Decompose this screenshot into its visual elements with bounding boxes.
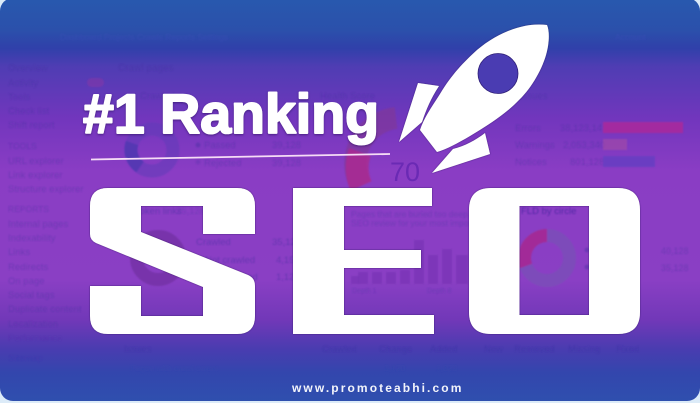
top bar faint menu: Account: [615, 32, 646, 42]
bottom table row: Pages with crawl errors: [130, 363, 218, 373]
rocket body: [420, 24, 549, 152]
bottom table row: 1,028: [436, 363, 458, 373]
activity badge: [87, 78, 104, 87]
website url: www.promoteabhi.com: [291, 381, 463, 395]
sidebar navigation text: Shift report: [8, 120, 55, 131]
bar chart description: Depth 8: [427, 288, 452, 295]
traffic legend: Crawled: [140, 91, 175, 102]
sidebar navigation text: On page: [8, 276, 44, 287]
sidebar navigation text: Redirects: [8, 262, 48, 273]
bottom table row: [130, 363, 458, 373]
letter O: [469, 188, 640, 334]
dashboard heading: Crawl pages: [118, 63, 174, 74]
crawl depth bar chart: [351, 240, 468, 284]
sidebar navigation text: Activity: [8, 78, 38, 89]
traffic legend: Rejected: [204, 158, 242, 169]
traffic legend: [140, 91, 375, 169]
sidebar navigation text: Performance: [8, 333, 62, 344]
issues table: Errors: [515, 123, 541, 134]
letter S: [90, 188, 255, 334]
links section text: Blocked: [224, 272, 258, 283]
sidebar navigation text: [8, 63, 84, 364]
circle section title: FLD by circle: [521, 206, 576, 217]
SEO letters: [90, 188, 640, 334]
bar chart description: [351, 209, 517, 295]
bottom table header: Crawled: [322, 344, 357, 355]
links section text: 4,157: [276, 255, 300, 266]
top bar faint menu: Dashboard Projects Crawls Reports Settings: [60, 32, 228, 42]
right donut legend: 40,128: [661, 246, 689, 256]
issues table: Warnings: [515, 140, 555, 151]
rocket left fin: [399, 83, 439, 142]
sidebar navigation text: URL explorer: [8, 156, 64, 167]
sidebar navigation text: Indexability: [8, 233, 56, 244]
right donut chart: [524, 236, 570, 280]
headline: #1 Ranking: #1 Ranking: [83, 82, 379, 145]
gauge pink segment: [357, 152, 361, 186]
top bar faint menu: [60, 32, 646, 42]
issues bars: [603, 122, 683, 133]
links section text: Broken links: [130, 206, 182, 217]
sidebar navigation text: Duplicate content: [8, 304, 82, 315]
right donut legend: 35,128: [661, 263, 689, 273]
traffic legend: Passed: [204, 140, 236, 151]
sidebar navigation text: Links: [8, 247, 30, 258]
issues table: [515, 91, 608, 168]
bottom table row: 3,120: [384, 363, 406, 373]
sidebar navigation text: TOOLS: [8, 141, 37, 151]
issues table: 38,123,149: [560, 123, 608, 134]
links section text: Not crawled: [205, 255, 255, 266]
links section text: 1,128: [276, 272, 300, 283]
links section text: [130, 206, 301, 283]
issues table: 2,053,340: [563, 140, 605, 151]
letter E: [293, 188, 434, 334]
sidebar navigation text: Social tags: [8, 290, 55, 301]
bottom table header: [124, 344, 639, 355]
sidebar navigation text: REPORTS: [8, 204, 49, 214]
bar chart description: Depth 1: [352, 288, 377, 295]
rocket lower fin: [432, 133, 490, 173]
health score gauge: [355, 118, 396, 186]
top donut chart: [131, 129, 173, 171]
traffic legend: 39,128: [272, 140, 301, 151]
traffic legend: 39,128: [272, 158, 301, 169]
links section text: Crawled: [196, 237, 231, 248]
bottom table header: Change: [379, 344, 412, 355]
links section text: 25,128: [176, 206, 205, 217]
sidebar navigation text: Sitemap: [8, 353, 43, 364]
links donut behind the S: [136, 236, 180, 280]
sidebar navigation text: Internal pages: [8, 219, 68, 230]
issues table: Issues: [520, 91, 548, 102]
bottom table header: Removed: [514, 344, 555, 355]
bottom table header: Added: [430, 344, 457, 355]
right donut legend: [584, 246, 689, 273]
rocket window: [478, 54, 518, 94]
issues table: Notices: [515, 157, 547, 168]
sidebar navigation text: Tools: [8, 92, 30, 103]
sidebar navigation text: Structure explorer: [8, 184, 84, 195]
headline underline: [91, 154, 390, 160]
sidebar navigation text: Check list: [8, 106, 50, 117]
gauge value: 70: [390, 157, 420, 187]
sidebar navigation text: Link explorer: [8, 170, 62, 181]
bottom table header: New: [484, 344, 503, 355]
traffic legend: Health Score: [320, 91, 375, 102]
sidebar navigation text: Localization: [8, 319, 58, 330]
bar chart description: SEO review for your most important content: [351, 218, 517, 228]
sidebar navigation text: Overview: [8, 63, 48, 74]
issues table: 801,128: [570, 157, 604, 168]
rocket icon: [399, 24, 549, 173]
bar chart description: Pages that are buried too deep, or need a: [351, 209, 509, 219]
links section text: 35,128: [272, 237, 301, 248]
bottom table header: Missing: [568, 344, 600, 355]
bottom table header: Issues: [124, 344, 152, 355]
bottom table header: Fixed: [616, 344, 639, 355]
